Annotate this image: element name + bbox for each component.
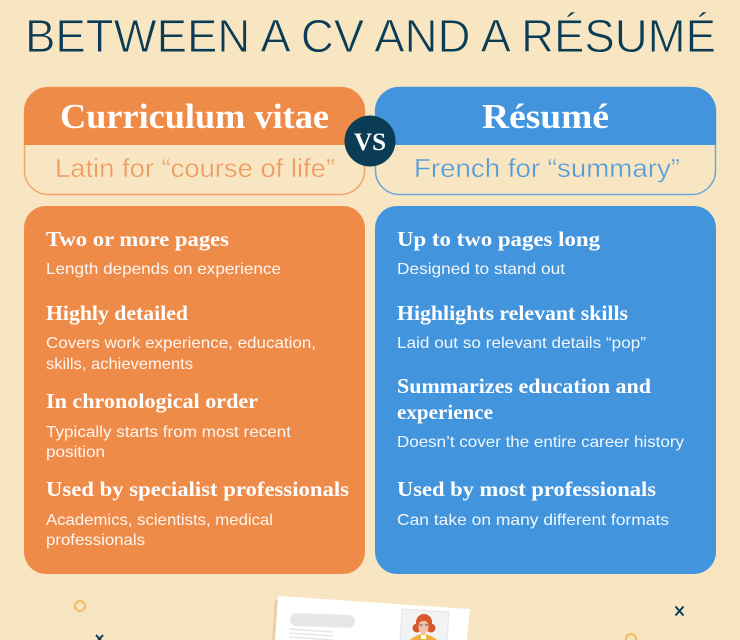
item: users: Used by most professionals: [397, 477, 656, 501]
item: length: [397, 227, 601, 278]
icon: ring right: [626, 634, 636, 640]
item: skills: [397, 301, 646, 352]
item: summary: Doesn’t cover the entire career history: [397, 434, 684, 451]
item: order: In chronological order: [46, 389, 258, 413]
item: length: Up to two pages long: [397, 227, 601, 251]
item: users: [397, 477, 669, 529]
icon: cross right: [676, 606, 684, 616]
item: length: Length depends on experience: [46, 261, 281, 278]
panel: résumé header: [375, 87, 716, 194]
item: summary: [397, 374, 684, 451]
panel: curriculum vitae details: [24, 206, 365, 574]
icon: ring left: [75, 601, 85, 611]
item: order: position: [46, 444, 105, 461]
item: length: Two or more pages: [46, 227, 229, 251]
vs badge: [344, 116, 396, 166]
subheading: french meaning: French for “summary”: [414, 153, 680, 183]
icon: cross left: [96, 635, 103, 640]
item: users: Academics, scientists, medical: [46, 512, 273, 529]
item: users: Used by specialist professionals: [46, 477, 349, 501]
panel: curriculum vitae header: [24, 87, 365, 194]
item: length: Designed to stand out: [397, 261, 566, 278]
subheading: latin meaning: Latin for “course of life”: [55, 153, 335, 183]
item: detail: Covers work experience, education,: [46, 335, 316, 352]
vs badge: VS: [354, 129, 386, 156]
item: skills: Laid out so relevant details “pop”: [397, 335, 646, 352]
item: detail: [46, 301, 316, 373]
item: users: [46, 477, 349, 549]
item: users: Can take on many different formats: [397, 512, 669, 529]
item: length: [46, 227, 281, 278]
item: order: [46, 389, 292, 461]
item: order: Typically starts from most recent: [46, 424, 292, 441]
item: skills: Highlights relevant skills: [397, 301, 628, 325]
title: BETWEEN A CV AND A RÉSUMÉ: [25, 10, 716, 62]
illustration: résumé document: [272, 596, 470, 640]
heading: résumé: Résumé: [482, 97, 609, 136]
heading: curriculum vitae: Curriculum vitae: [60, 97, 329, 136]
panel: résumé details: [375, 206, 716, 574]
item: detail: skills, achievements: [46, 356, 193, 373]
icon: portrait: [410, 614, 437, 640]
item: summary: experience: [397, 400, 493, 424]
item: summary: Summarizes education and: [397, 374, 651, 398]
item: users: professionals: [46, 532, 145, 549]
item: detail: Highly detailed: [46, 301, 188, 325]
